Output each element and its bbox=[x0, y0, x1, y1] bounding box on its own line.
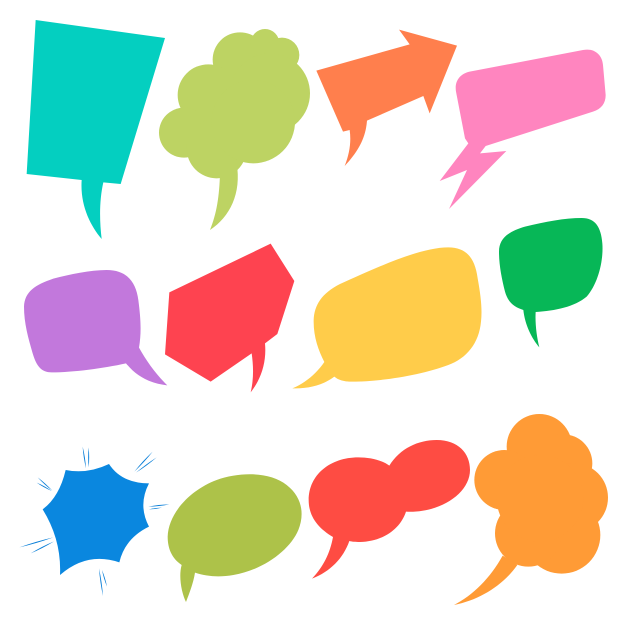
bubble: red hexagon bbox=[165, 244, 294, 392]
bubble: red double oval bbox=[309, 440, 470, 579]
bubble: green rounded bbox=[499, 218, 603, 347]
bubble: teal trapezoid bbox=[27, 20, 165, 239]
bubble: blue burst with rays bbox=[19, 447, 169, 596]
bubble: yellow rounded bbox=[292, 247, 482, 388]
bubble: purple rounded bbox=[24, 270, 167, 385]
icon: burst rays bbox=[19, 447, 169, 596]
bubble: orange cloud bbox=[454, 414, 608, 605]
icon: burst body bbox=[43, 464, 149, 575]
bubble: lime cloud bbox=[159, 29, 310, 230]
bubble: olive oval bbox=[168, 474, 302, 602]
bubble: orange arrow bbox=[316, 30, 457, 166]
bubble: pink rounded with lightning tail bbox=[440, 50, 606, 209]
